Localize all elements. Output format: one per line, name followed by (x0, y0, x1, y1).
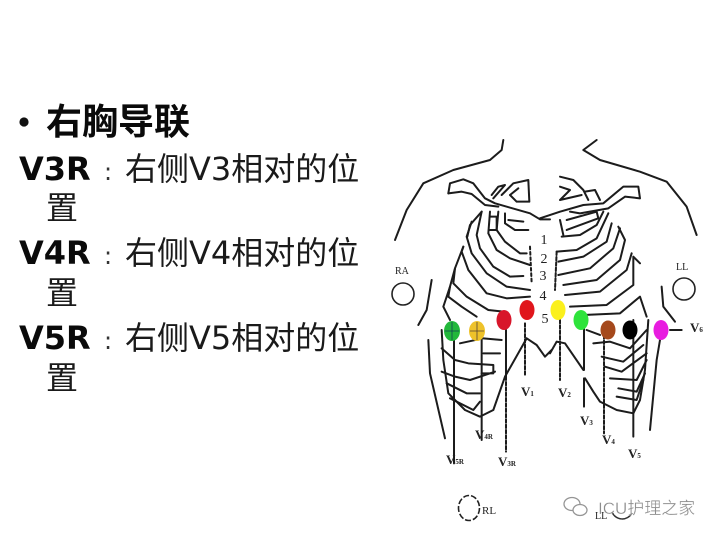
electrode: black V5 (622, 320, 638, 340)
electrodes (444, 300, 668, 341)
text block: V5R: V5R (19, 319, 91, 357)
electrode: gold V4R (469, 321, 485, 341)
text block: V3R: V3R (19, 150, 91, 188)
chest diagram (392, 140, 703, 522)
text block: V5R (19, 319, 359, 397)
limb electrode: RL (458, 496, 496, 520)
lead labels: V2 (558, 385, 571, 400)
right clavicle and ribs (540, 177, 647, 317)
text block: V3R: 右侧V3相对的位 (125, 150, 359, 188)
sternum numbers: 2 (540, 252, 548, 267)
limb electrode: LL upper: LL (676, 262, 688, 273)
electrode: magenta V6 (654, 320, 668, 340)
icon: chat bubbles (564, 498, 587, 516)
electrode: green V3 (574, 310, 588, 330)
limb electrode: LL lower (595, 511, 632, 522)
text block: V4R: V4R (19, 234, 91, 272)
text block: V3R: : (104, 158, 112, 186)
text block: V3R (19, 150, 359, 227)
sternum numbers: 5 (542, 312, 548, 327)
lead labels: V4 (602, 432, 615, 447)
electrode: green V5R (444, 321, 460, 341)
electrode: brown V4 (600, 320, 616, 340)
lead labels: V1 (521, 384, 534, 399)
electrode: yellow V2 (550, 300, 566, 320)
left clavicle and ribs (443, 179, 550, 320)
sternum numbers (540, 233, 548, 327)
limb electrode: RA: RA (395, 266, 410, 277)
lead labels (446, 320, 703, 469)
title: right chest leads: 右胸导联 (46, 102, 190, 143)
watermark (564, 498, 695, 518)
left lower rib cage and lead lines (442, 323, 552, 463)
text block: V5R: 右侧V5相对的位 (125, 319, 359, 357)
electrode: red V1 (520, 300, 534, 320)
text block: V4R: 置 (46, 274, 78, 312)
text block: V3R: 置 (46, 189, 78, 227)
text block: V5R: : (104, 327, 112, 355)
lead labels: V6 (690, 320, 703, 335)
lead labels: V4R (475, 427, 494, 442)
body outline (395, 140, 697, 438)
right lower rib cage and lead lines (550, 320, 682, 437)
text block: V4R (19, 234, 359, 312)
lead labels: V3R (498, 454, 517, 469)
text block: V4R: : (104, 242, 112, 270)
sternum numbers: 1 (540, 233, 548, 248)
text block: V5R: 置 (46, 359, 78, 397)
lead labels: V5 (628, 446, 641, 461)
lead labels: V5R (446, 452, 465, 467)
limb electrode: RL: RL (482, 505, 496, 517)
limb electrode: LL lower: LL (595, 511, 607, 522)
text block: V4R: 右侧V4相对的位 (125, 234, 359, 272)
sternum numbers: 4 (540, 289, 546, 304)
electrode: red V3R (496, 310, 512, 330)
sternum numbers: 3 (540, 269, 546, 284)
watermark: ICU护理之家 (598, 499, 695, 518)
limb electrode: LL upper (673, 262, 695, 300)
limb electrode: RA (392, 266, 414, 305)
lead labels: V3 (580, 413, 593, 428)
